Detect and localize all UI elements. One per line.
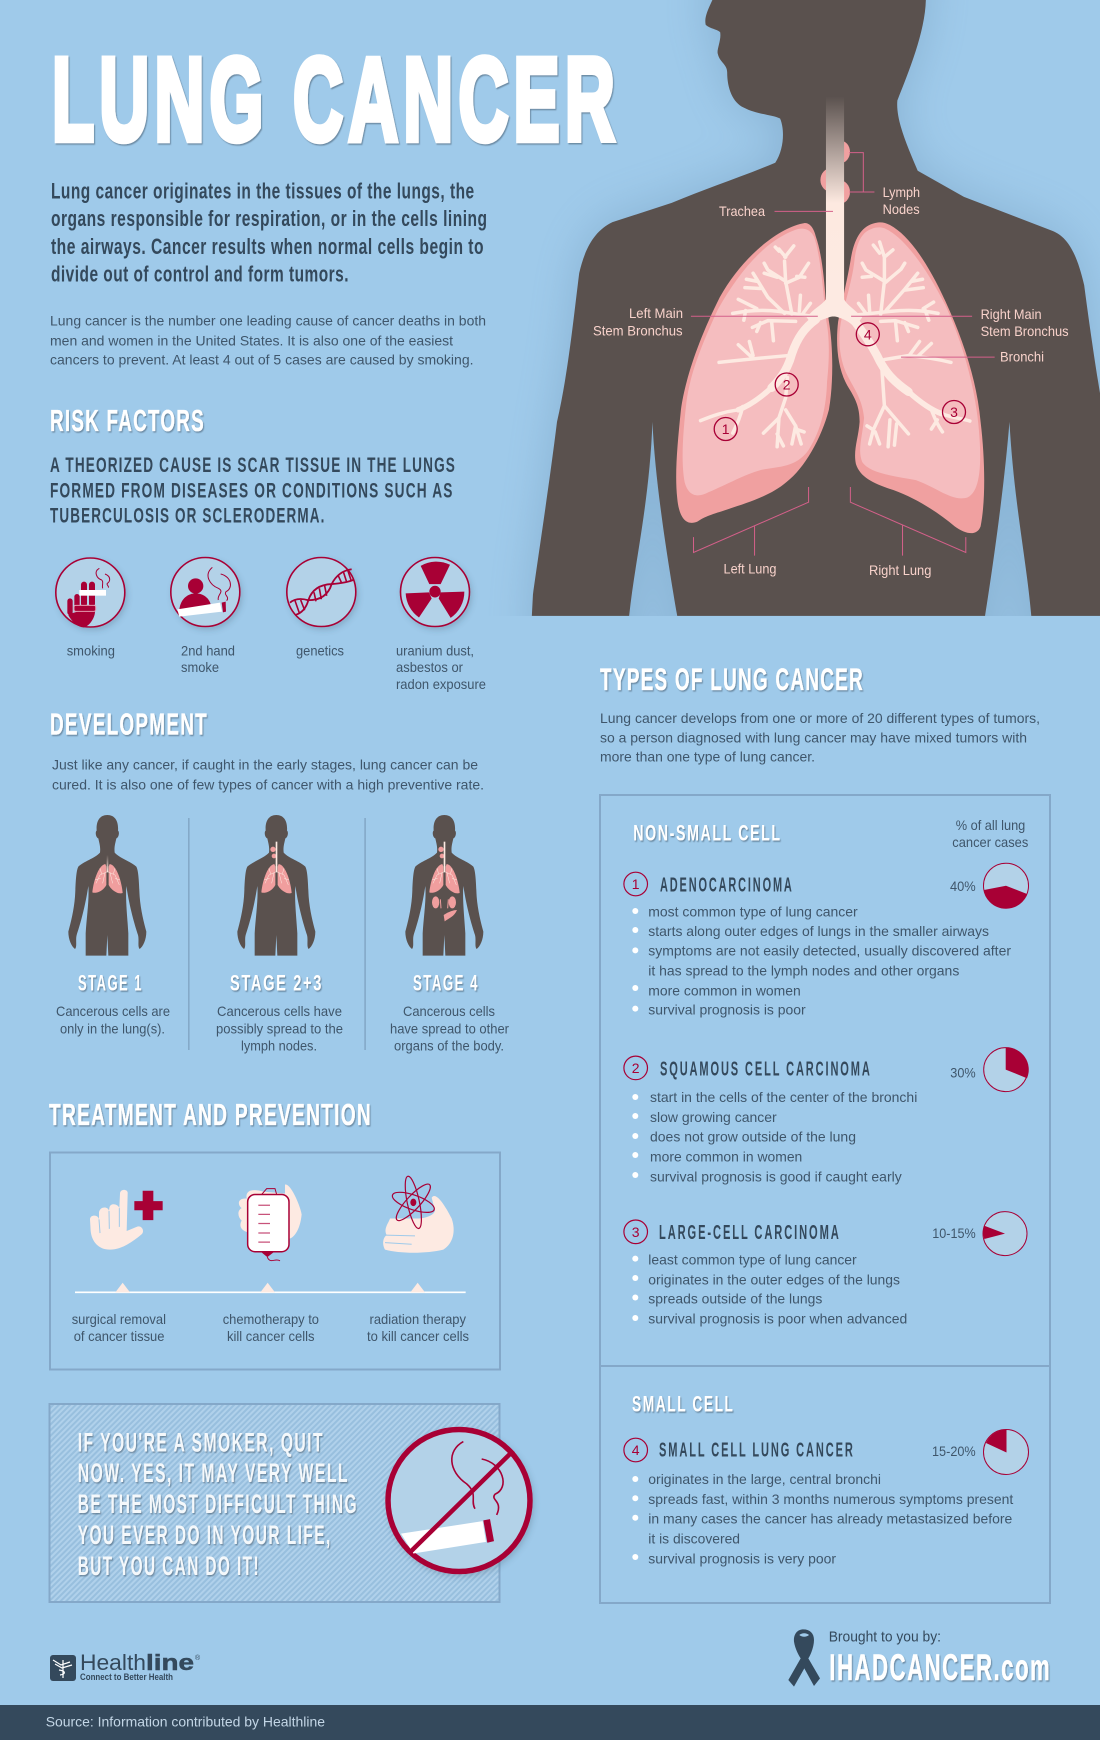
stage 1 text: Cancerous cells are xyxy=(56,1003,170,1019)
icons and timeline xyxy=(75,1174,466,1293)
caption: chemotherapy: kill cancer cells xyxy=(227,1328,314,1344)
logo mark xyxy=(50,1655,76,1681)
caption: radiation: to kill cancer cells xyxy=(367,1328,469,1344)
bullet list: slow growing cancer xyxy=(650,1109,777,1125)
bullet list xyxy=(632,1251,907,1327)
pie legend: % of all lung xyxy=(956,817,1025,833)
bullet list: symptoms are not easily detected, usually discovered after xyxy=(648,942,1011,958)
stage 1 text xyxy=(56,970,170,1036)
types intro xyxy=(600,710,1040,765)
heading: risk factors: RISK FACTORS xyxy=(50,404,205,438)
icon: radiation xyxy=(400,558,470,626)
intro body paragraph: men and women in the United States. It is also one of the easiest xyxy=(50,332,453,348)
intro lead paragraph: Lung cancer originates in the tissues of the lungs, the xyxy=(51,179,475,204)
anatomy diagram: torso, lungs and labels xyxy=(524,0,1100,616)
bullet list: it has spread to the lymph nodes and other organs xyxy=(648,962,959,978)
bullet list: start in the cells of the center of the bronchi xyxy=(650,1089,917,1105)
caption: surgery: of cancer tissue xyxy=(74,1328,165,1344)
intro lead paragraph: organs responsible for respiration, or in the cells lining xyxy=(51,206,488,231)
intro body paragraph xyxy=(50,312,486,367)
type 4: small cell lung cancer: 15-20% xyxy=(932,1443,976,1459)
numbered lung markers: 4 xyxy=(864,326,872,342)
pie legend xyxy=(952,817,1028,850)
intro body paragraph: Lung cancer is the number one leading cause of cancer deaths in both xyxy=(50,312,486,328)
bullet list: survival prognosis is good if caught early xyxy=(650,1168,902,1184)
panel: quit smoking callout xyxy=(50,1404,530,1602)
risk factors subheading: FORMED FROM DISEASES OR CONDITIONS SUCH AS xyxy=(50,479,454,503)
stage 4 text: Cancerous cells xyxy=(403,1003,495,1019)
risk factors subheading xyxy=(50,453,456,528)
heading: types of lung cancer: TYPES OF LUNG CANCER xyxy=(600,661,864,697)
heading: development: DEVELOPMENT xyxy=(50,708,208,742)
logo: healthline: line xyxy=(146,1650,194,1675)
numbered lung markers: 1 xyxy=(722,421,730,437)
stage 4 text: STAGE 4 xyxy=(413,970,479,995)
left lung xyxy=(676,223,832,523)
label: radiation exposure: uranium dust, xyxy=(396,642,474,658)
bullet list: in many cases the cancer has already metastasized before xyxy=(648,1510,1012,1526)
stage 4 text: have spread to other xyxy=(390,1020,509,1036)
torso silhouette xyxy=(532,0,1100,616)
caption: chemotherapy xyxy=(223,1311,319,1344)
title: LUNG CANCER xyxy=(52,34,620,166)
anatomy labels: Trachea xyxy=(719,203,765,219)
caption: surgery xyxy=(72,1311,166,1344)
bronchi xyxy=(701,242,970,447)
heading: treatment and prevention: TREATMENT AND PREVENTION xyxy=(49,1098,372,1132)
caption: surgery: surgical removal xyxy=(72,1311,166,1327)
stage 4 text xyxy=(390,970,509,1054)
bullet list xyxy=(632,903,1011,1017)
icon: genetics xyxy=(287,558,356,626)
type 2: squamous cell carcinoma xyxy=(624,1048,1029,1184)
icon: no smoking xyxy=(388,1430,530,1572)
bullet list: originates in the large, central bronchi xyxy=(648,1471,881,1487)
right lung xyxy=(837,222,984,533)
stage 2+3 text: possibly spread to the xyxy=(216,1020,343,1036)
pie chart: 30% xyxy=(984,1048,1029,1092)
anatomy labels: Right Lung xyxy=(869,562,931,578)
intro lead paragraph: the airways. Cancer results when normal cells begin to xyxy=(51,234,484,259)
stage 2+3 text xyxy=(216,970,343,1054)
bullet list: more common in women xyxy=(648,982,801,998)
type 4: small cell lung cancer: SMALL CELL LUNG CANCER xyxy=(659,1439,855,1462)
bullet list: most common type of lung cancer xyxy=(648,903,858,919)
callout lines xyxy=(691,153,995,556)
source line: Source: Information contributed by Healthline xyxy=(46,1713,325,1729)
stage 1 text: STAGE 1 xyxy=(78,970,143,995)
bullet list xyxy=(632,1471,1013,1566)
figure: stage 1 xyxy=(68,815,146,956)
lymph nodes xyxy=(820,141,850,204)
type 3: large-cell carcinoma: 3 xyxy=(632,1224,640,1240)
stage 2+3 text: Cancerous cells have xyxy=(217,1003,342,1019)
figure: stage 4 xyxy=(405,815,483,956)
bullet list: more common in women xyxy=(650,1148,802,1164)
label: smoking: smoking xyxy=(67,642,115,658)
development intro xyxy=(52,757,484,793)
bullet list: spreads outside of the lungs xyxy=(648,1291,822,1307)
logo: healthline: Health xyxy=(80,1650,146,1675)
label: radiation exposure: radon exposure xyxy=(396,676,486,692)
heading: non-small cell: NON-SMALL CELL xyxy=(633,821,782,846)
intro lead paragraph xyxy=(51,179,488,287)
heading: small cell: SMALL CELL xyxy=(632,1392,734,1417)
stage 1 text: only in the lung(s). xyxy=(60,1020,165,1036)
bullet list: survival prognosis is poor when advanced xyxy=(648,1311,907,1327)
anatomy labels xyxy=(593,184,1069,578)
logo: healthline: Connect to Better Health xyxy=(80,1672,173,1682)
caption: radiation: radiation therapy xyxy=(370,1311,466,1327)
anatomy labels: Left Main xyxy=(629,305,683,321)
stage 2+3 text: lymph nodes. xyxy=(241,1038,317,1054)
timeline xyxy=(75,1283,466,1293)
icon: awareness ribbon xyxy=(788,1629,820,1687)
label: radiation exposure xyxy=(396,642,486,692)
bullet list: does not grow outside of the lung xyxy=(650,1128,856,1144)
anatomy labels: Stem Bronchus xyxy=(593,322,683,338)
callout text: IF YOU'RE A SMOKER, QUIT xyxy=(78,1428,324,1458)
type 2: squamous cell carcinoma: 2 xyxy=(632,1060,640,1076)
anatomy labels: Nodes xyxy=(883,201,920,217)
types intro: Lung cancer develops from one or more of 20 different types of tumors, xyxy=(600,710,1040,726)
callout text xyxy=(78,1428,358,1581)
type 4: small cell lung cancer xyxy=(624,1430,1028,1566)
callout text: BUT YOU CAN DO IT! xyxy=(78,1551,260,1581)
numbered lung markers xyxy=(714,323,966,440)
pie chart: 15-20% xyxy=(984,1430,1028,1474)
type 4: small cell lung cancer: 4 xyxy=(632,1442,640,1458)
figure: stage 2+3 xyxy=(237,815,315,956)
anatomy labels: Stem Bronchus xyxy=(981,323,1069,339)
bullet list xyxy=(632,1089,917,1184)
bullet list: starts along outer edges of lungs in the smaller airways xyxy=(648,923,989,939)
type 1: adenocarcinoma xyxy=(624,863,1028,1017)
trachea xyxy=(807,96,862,327)
stage dividers xyxy=(188,818,366,1050)
label: second hand smoke: smoke xyxy=(181,659,219,675)
type 3: large-cell carcinoma: 10-15% xyxy=(932,1225,976,1241)
pie legend: cancer cases xyxy=(952,834,1028,850)
risk factors subheading: A THEORIZED CAUSE IS SCAR TISSUE IN THE LUNGS xyxy=(50,453,456,477)
type 3: large-cell carcinoma: LARGE-CELL CARCINOMA xyxy=(659,1221,841,1244)
callout text: BE THE MOST DIFFICULT THING xyxy=(78,1489,358,1519)
bullet list: least common type of lung cancer xyxy=(648,1251,857,1267)
logo: ihadcancer.com xyxy=(788,1629,1051,1688)
panel: treatment xyxy=(50,1152,500,1370)
icon: smoking xyxy=(56,558,125,627)
label: second hand smoke: 2nd hand xyxy=(181,642,235,658)
bullet list: it is discovered xyxy=(648,1530,740,1546)
icon: surgery hand xyxy=(90,1190,163,1250)
type 2: squamous cell carcinoma: SQUAMOUS CELL CARCINOMA xyxy=(660,1057,872,1080)
icon: second hand smoke xyxy=(171,558,240,626)
bullet list: spreads fast, within 3 months numerous symptoms present xyxy=(648,1491,1013,1507)
callout text: NOW. YES, IT MAY VERY WELL xyxy=(78,1458,349,1488)
type 2: squamous cell carcinoma: 30% xyxy=(950,1064,976,1080)
numbered lung markers: 3 xyxy=(950,404,958,420)
logo: healthline xyxy=(50,1650,201,1682)
callout text: YOU EVER DO IN YOUR LIFE, xyxy=(78,1520,332,1550)
pie chart: 40% xyxy=(984,863,1028,908)
pie chart: 10-15% xyxy=(983,1212,1027,1256)
intro lead paragraph: divide out of control and form tumors. xyxy=(51,262,349,287)
icon: radiation hand xyxy=(383,1174,454,1253)
development intro: Just like any cancer, if caught in the early stages, lung cancer can be xyxy=(52,757,478,773)
development intro: cured. It is also one of few types of cancer with a high preventive rate. xyxy=(52,777,484,793)
numbered lung markers: 2 xyxy=(783,376,791,392)
bullet list: survival prognosis is poor xyxy=(648,1001,806,1017)
stage 4 text: organs of the body. xyxy=(394,1038,504,1054)
risk factors subheading: TUBERCULOSIS OR SCLERODERMA. xyxy=(50,504,326,528)
anatomy labels: Bronchi xyxy=(1000,349,1044,365)
panel: types of cancer xyxy=(600,795,1050,1603)
types intro: more than one type of lung cancer. xyxy=(600,749,815,765)
type 1: adenocarcinoma: ADENOCARCINOMA xyxy=(660,873,794,896)
label: radiation exposure: asbestos or xyxy=(396,659,463,675)
anatomy labels: Right Main xyxy=(981,306,1042,322)
caption: radiation xyxy=(367,1311,469,1344)
body shadow xyxy=(524,0,1100,616)
logo: ihadcancer.com: Brought to you by: xyxy=(829,1629,941,1646)
bullet list: originates in the outer edges of the lungs xyxy=(648,1271,900,1287)
type 3: large-cell carcinoma xyxy=(624,1212,1027,1327)
logo: healthline: ® xyxy=(195,1654,201,1662)
caption: chemotherapy: chemotherapy to xyxy=(223,1311,319,1327)
label: genetics: genetics xyxy=(296,642,344,658)
footer bar xyxy=(0,1705,1100,1740)
bullet list: survival prognosis is very poor xyxy=(648,1550,836,1566)
type 1: adenocarcinoma: 1 xyxy=(632,876,640,892)
type 1: adenocarcinoma: 40% xyxy=(950,878,976,894)
label: second hand smoke xyxy=(181,642,235,675)
icon: chemotherapy bag xyxy=(238,1184,302,1261)
stage 2+3 text: STAGE 2+3 xyxy=(230,970,323,995)
anatomy labels: Lymph xyxy=(883,184,920,200)
anatomy labels: Left Lung xyxy=(724,561,776,577)
intro body paragraph: cancers to prevent. At least 4 out of 5 cases are caused by smoking. xyxy=(50,351,474,367)
types intro: so a person diagnosed with lung cancer may have mixed tumors with xyxy=(600,730,1027,746)
